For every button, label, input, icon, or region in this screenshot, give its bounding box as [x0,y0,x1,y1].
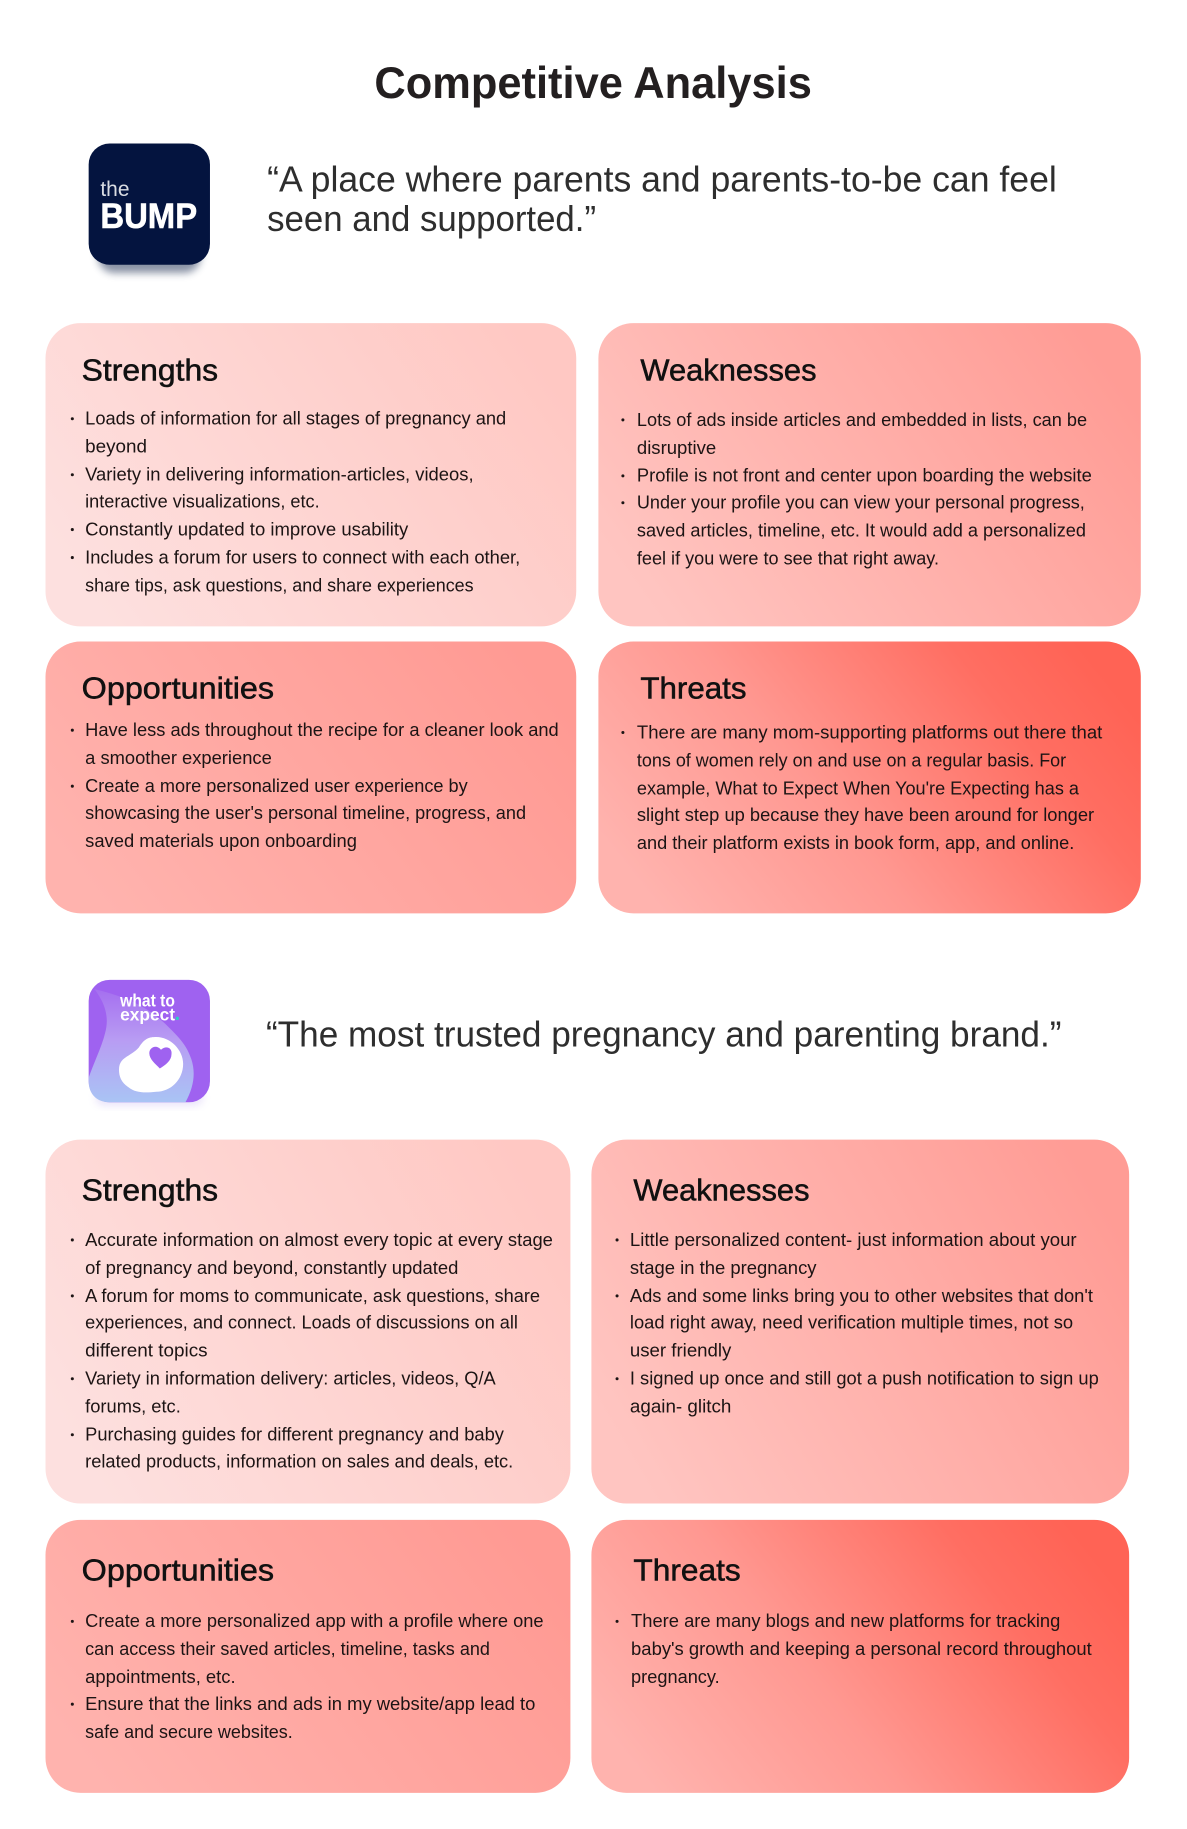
icon: What to Expect logo: expect [120,1005,175,1025]
list: opportunities: showcasing the user's personal timeline, progress, and [85,803,526,823]
list: threats: and their platform exists in book form, app, and online. [637,833,1074,853]
list: weaknesses: Little personalized content- just information about your [630,1230,1077,1250]
list: weaknesses: feel if you were to see that right away. [637,549,939,569]
heading: opportunities: Opportunities [82,673,274,706]
list: threats: example, What to Expect When You're Expecting has a [637,778,1080,798]
list: threats: slight step up because they have been around for longer [637,805,1094,825]
list: weaknesses [616,1230,1099,1417]
list: opportunities [71,720,559,851]
icon: The Bump logo: the [100,178,129,201]
title: Competitive Analysis [374,59,812,108]
list: opportunities: Have less ads throughout the recipe for a cleaner look and [85,720,559,740]
list: weaknesses: Lots of ads inside articles and embedded in lists, can be [637,410,1087,430]
list: threats [621,722,1102,853]
list: threats: tons of women rely on and use on a regular basis. For [637,750,1066,770]
list: weaknesses: again- glitch [630,1397,731,1417]
list: strengths: different topics [85,1341,208,1361]
icon: The Bump logo [89,143,210,273]
panel: weaknesses [598,323,1141,626]
list: strengths: Accurate information on almost every topic at every stage [85,1230,553,1250]
quote: The Bump [267,158,1057,239]
list: opportunities: Create a more personalized user experience by [85,776,468,796]
list: threats: baby's growth and keeping a personal record throughout [631,1639,1092,1659]
list: opportunities: appointments, etc. [85,1667,236,1687]
list: opportunities: a smoother experience [85,748,272,768]
list: opportunities: Create a more personalized app with a profile where one [85,1611,544,1631]
list: threats: There are many blogs and new platforms for tracking [631,1611,1060,1631]
list: strengths: beyond [85,437,147,457]
list: weaknesses: disruptive [637,438,716,458]
list: strengths: of pregnancy and beyond, constantly updated [85,1258,458,1278]
list: weaknesses: saved articles, timeline, etc. It would add a personalized [637,521,1086,541]
heading: strengths: Strengths [82,1174,218,1207]
list: strengths [71,1230,553,1471]
list: strengths: Variety in information delivery: articles, videos, Q/A [85,1369,497,1389]
icon: The Bump logo: BUMP [100,196,197,236]
list: threats: There are many mom-supporting platforms out there that [637,722,1102,742]
list: strengths: forums, etc. [85,1397,181,1417]
icon: What to Expect logo: what to [119,991,175,1011]
list: weaknesses: Under your profile you can view your personal progress, [637,493,1085,513]
list: weaknesses: Profile is not front and center upon boarding the website [637,466,1092,486]
list: weaknesses: user friendly [630,1341,731,1361]
list: strengths: Variety in delivering information-articles, videos, [85,465,474,485]
icon: What to Expect logo [89,980,210,1106]
panel: opportunities [45,642,576,913]
heading: strengths: Strengths [82,354,218,387]
panel: strengths [45,323,576,626]
list: opportunities [71,1611,544,1742]
quote: What to Expect: “The most trusted pregnancy and parenting brand.” [266,1013,1061,1054]
quote: The Bump: seen and supported.” [267,198,596,239]
heading: threats: Threats [633,1555,741,1588]
list: threats [616,1611,1092,1687]
list: opportunities: can access their saved articles, timeline, tasks and [85,1639,490,1659]
heading: opportunities: Opportunities [82,1555,274,1588]
list: opportunities: saved materials upon onboarding [85,831,357,851]
list: strengths: interactive visualizations, etc. [85,491,320,511]
panel: opportunities [45,1520,570,1793]
section: What to Expect [45,980,1129,1793]
heading: weaknesses: Weaknesses [633,1174,810,1207]
list: strengths: Constantly updated to improve usability [85,519,408,539]
list: strengths [71,409,520,595]
list: weaknesses [621,410,1092,569]
list: strengths: share tips, ask questions, and share experiences [85,575,474,595]
list: strengths: A forum for moms to communicate, ask questions, share [85,1286,540,1306]
list: strengths: Purchasing guides for different pregnancy and baby [85,1425,504,1445]
list: opportunities: safe and secure websites. [85,1722,293,1742]
heading: weaknesses: Weaknesses [640,354,817,387]
panel: weaknesses [591,1140,1129,1504]
list: weaknesses: I signed up once and still got a push notification to sign up [630,1369,1099,1389]
list: weaknesses: load right away, need verification multiple times, not so [630,1313,1073,1333]
list: weaknesses: Ads and some links bring you to other websites that don't [630,1286,1093,1306]
list: weaknesses: stage in the pregnancy [630,1258,817,1278]
section: The Bump [45,143,1141,913]
list: threats: pregnancy. [631,1667,720,1687]
list: strengths: experiences, and connect. Loads of discussions on all [85,1313,518,1333]
list: strengths: Includes a forum for users to connect with each other, [85,547,520,567]
list: opportunities: Ensure that the links and ads in my website/app lead to [85,1694,535,1714]
panel: threats [591,1520,1129,1793]
quote: The Bump: “A place where parents and parents-to-be can feel [267,158,1057,199]
panel: strengths [45,1140,570,1504]
list: strengths: Loads of information for all stages of pregnancy and [85,409,506,429]
heading: threats: Threats [640,673,747,706]
panel: threats [598,642,1141,913]
list: strengths: related products, information on sales and deals, etc. [85,1451,513,1471]
